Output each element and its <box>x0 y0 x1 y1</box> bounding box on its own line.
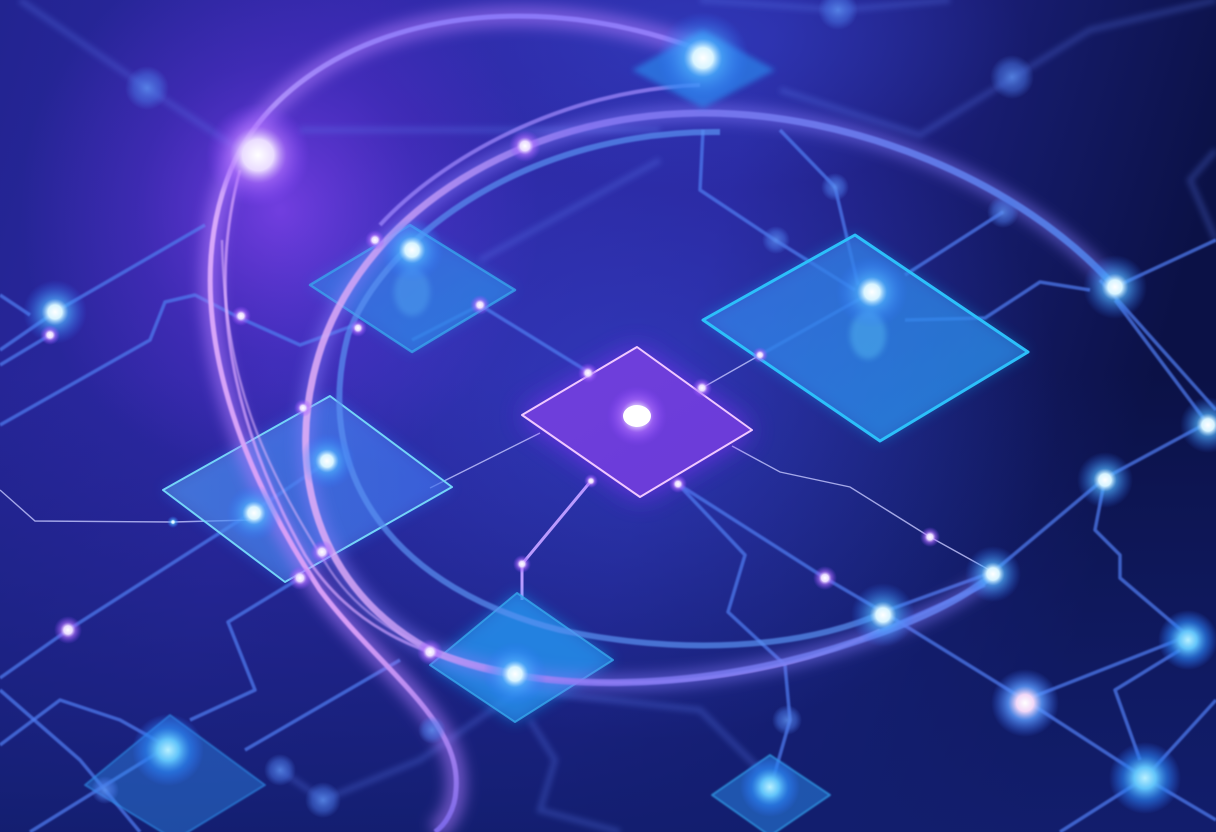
second purple sweep <box>225 170 880 683</box>
nodes: small connectors <box>40 130 940 665</box>
inner blue ring <box>339 132 885 645</box>
main ring glow <box>306 113 1115 683</box>
main ring line <box>306 113 1115 683</box>
panel: central purple chip <box>522 347 752 497</box>
panel: right glass <box>703 235 1028 441</box>
panel: bottom left glass <box>85 715 265 832</box>
purple connector <box>522 481 591 600</box>
nodes: dim <box>91 0 1034 818</box>
ring arcs <box>210 16 1115 832</box>
third purple sweep <box>222 240 520 672</box>
panel: bottom right glass <box>712 755 830 832</box>
panel: upper left glass <box>310 225 515 352</box>
panel: bottom glass <box>430 593 613 722</box>
thin bright traces <box>0 355 993 572</box>
hub glow: top <box>632 30 775 108</box>
top ring arc <box>380 85 700 225</box>
outer purple sweep glow <box>210 16 700 832</box>
outer purple line <box>210 16 700 832</box>
panel: left glass <box>163 396 452 582</box>
